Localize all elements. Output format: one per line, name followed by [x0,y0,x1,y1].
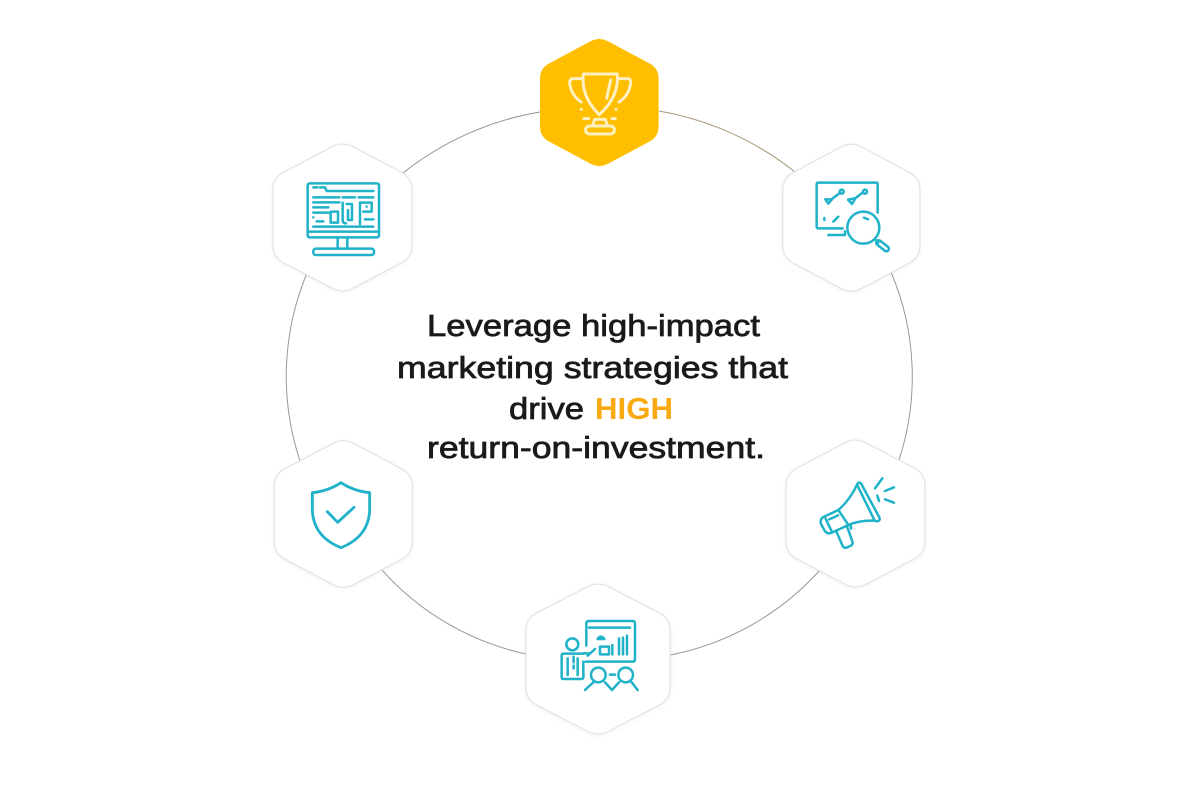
icon: shield with check [312,483,370,548]
central headline: HIGH [595,391,673,426]
hexagon: trophy [540,39,659,166]
hexagon: chart search [783,144,920,291]
icon: megaphone [821,478,894,548]
central headline: Leverage high-impact [427,308,760,343]
hexagon: presentation [526,584,670,734]
icon: trophy [570,74,631,134]
ring connecting the hexagons [286,111,912,655]
central headline: drive [509,391,584,426]
central headline: marketing strategies that [397,350,788,385]
icon: presenter with audience [562,621,638,690]
hexagon: monitor [273,144,412,291]
hexagon: megaphone [786,440,925,587]
central headline: return-on-investment. [427,430,765,465]
icon: monitor with code [308,183,379,255]
hexagon: shield [274,441,412,587]
icon: chart with magnifier [817,183,890,252]
central headline [397,308,788,465]
